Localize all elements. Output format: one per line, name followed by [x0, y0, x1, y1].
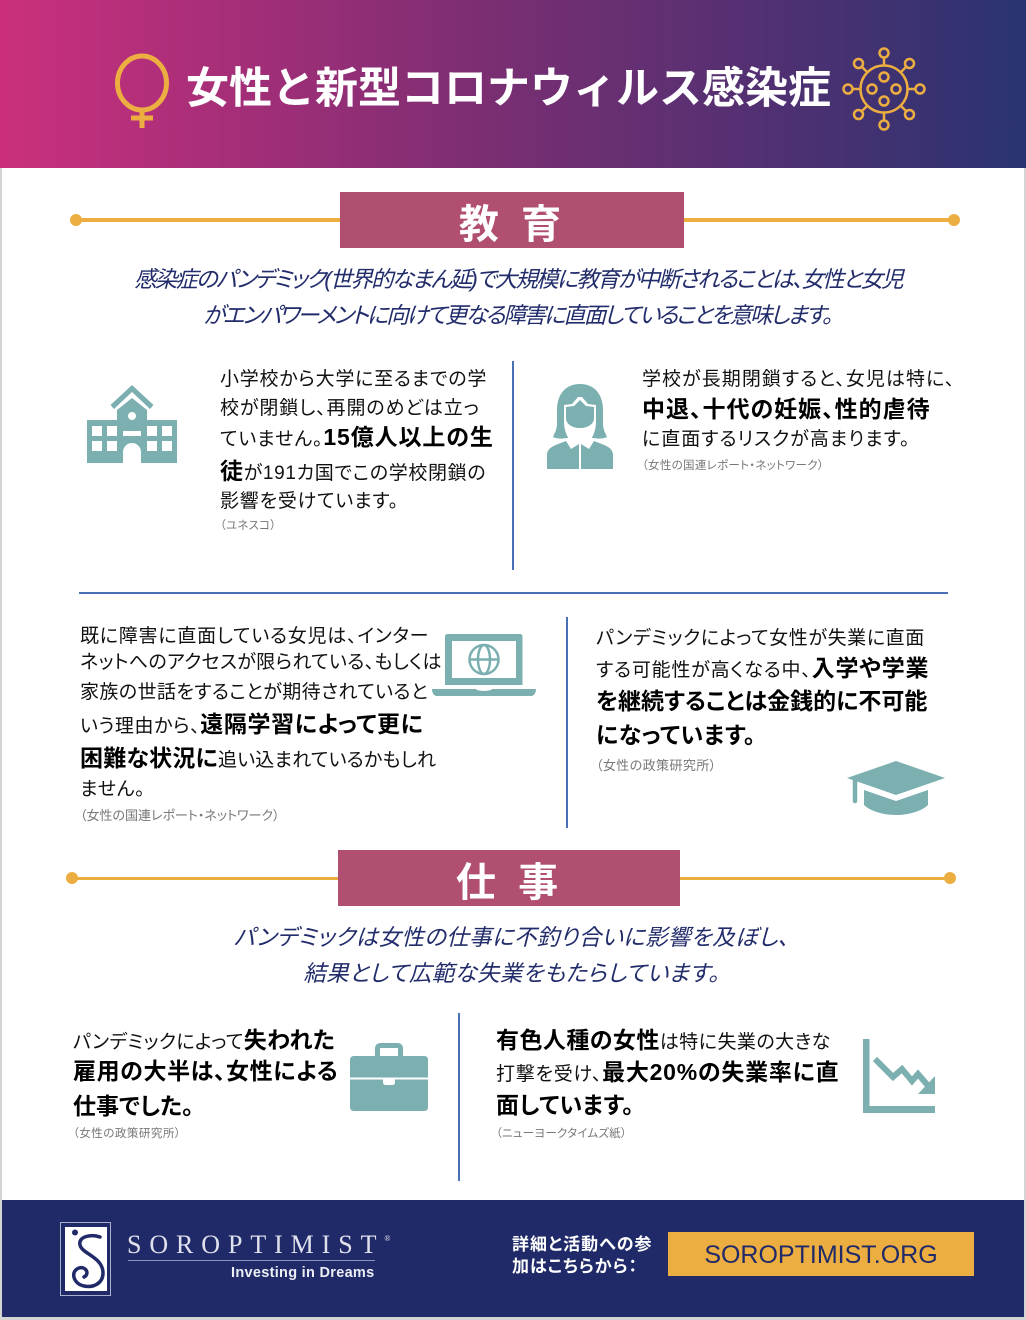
text: women of colour unemployment: 打撃を受け、最大20%の失業率に直 [496, 1059, 839, 1085]
text: school closures: 小学校から大学に至るまでの学 [220, 369, 487, 390]
icon: laptop [432, 634, 536, 696]
text: women of colour unemployment: 面しています。 [496, 1092, 634, 1118]
work intro: 結果として広範な失業をもたらしています。 [303, 961, 720, 986]
text: remote learning: いう理由から、遠隔学習によって更に [80, 711, 423, 737]
text: girls risks [642, 368, 955, 472]
text: school closures: 校が閉鎖し、再開のめどは立っ [220, 398, 480, 419]
footer call to action [512, 1235, 653, 1276]
section heading: education [340, 192, 684, 248]
logo mark [60, 1222, 111, 1296]
footer call to action: 加はこちらから： [512, 1257, 638, 1276]
text: school closures: 徒が191カ国でこの学校閉鎖の [220, 458, 486, 484]
text: remote learning [80, 626, 442, 823]
section heading: work: 仕 事 [456, 861, 558, 905]
section heading: education: 教 育 [459, 203, 561, 247]
text: remote learning: ネットへのアクセスが限られている、もしくは [80, 652, 442, 673]
text: job losses: 仕事でした。 [73, 1093, 194, 1119]
section line: work [72, 876, 950, 880]
text: girls risks: 中退、十代の妊娠、性的虐待 [642, 396, 931, 422]
text: job losses: 雇用の大半は、女性による [73, 1058, 338, 1084]
text: job losses: パンデミックによって失われた [73, 1027, 335, 1053]
footer call to action: 詳細と活動への参 [512, 1235, 653, 1254]
text: girls risks: に直面するリスクが高まります。 [642, 429, 910, 450]
icon: school [87, 385, 177, 463]
text: job losses [73, 1027, 338, 1140]
text: women of colour unemployment [496, 1027, 839, 1140]
education intro: がエンパワーメントに向けて更なる障害に直面していることを意味します。 [203, 303, 831, 328]
text: job losses: （女性の政策研究所） [73, 1128, 181, 1140]
icon: virus [842, 47, 926, 131]
text: financial barriers: する可能性が高くなる中、入学や学業 [596, 655, 929, 681]
text: women of colour unemployment: 有色人種の女性は特に失業の大きな [496, 1027, 831, 1053]
header banner [0, 0, 1026, 168]
icon: girl student [547, 384, 613, 469]
title: 女性と新型コロナウィルス感染症 [186, 65, 831, 113]
divider [79, 592, 948, 594]
section line: education [76, 218, 954, 222]
text: financial barriers: （女性の政策研究所） [596, 758, 717, 773]
education intro [134, 267, 906, 328]
text: remote learning: ません。 [80, 779, 145, 800]
text: girls risks: （女性の国連レポート・ネットワーク） [642, 460, 824, 472]
text: school closures [220, 368, 494, 532]
text: girls risks: 学校が長期閉鎖すると、女児は特に、 [642, 369, 955, 390]
text: school closures: ていません。15億人以上の生 [220, 424, 494, 450]
logo: Soroptimist [60, 1222, 390, 1296]
website button [668, 1232, 974, 1276]
text: school closures: 影響を受けています。 [220, 491, 399, 512]
icon: venus symbol [115, 54, 169, 128]
education intro: 感染症のパンデミック(世界的なまん延)で大規模に教育が中断されることは、女性と女児 [134, 267, 902, 292]
footer [2, 1200, 1024, 1317]
text: remote learning: 既に障害に直面している女児は、インター [80, 626, 429, 647]
icon: graduation cap [847, 761, 945, 815]
work intro: パンデミックは女性の仕事に不釣り合いに影響を及ぼし、 [234, 925, 789, 950]
section heading: work [338, 850, 680, 906]
icon: briefcase [350, 1043, 428, 1111]
wordmark: SOROPTIMIST® [127, 1230, 390, 1259]
text: school closures: （ユネスコ） [220, 520, 276, 532]
work intro [234, 925, 789, 986]
text: remote learning: 家族の世話をすることが期待されていると [80, 682, 428, 703]
text: remote learning: 困難な状況に追い込まれているかもしれ [80, 745, 436, 771]
text: remote learning: （女性の国連レポート・ネットワーク） [80, 808, 280, 823]
text: financial barriers: パンデミックによって女性が失業に直面 [596, 628, 925, 649]
text: women of colour unemployment: （ニューヨークタイムズ紙） [496, 1128, 627, 1140]
text: financial barriers: になっています。 [596, 722, 756, 748]
text: financial barriers: を継続することは金銭的に不可能 [596, 688, 927, 714]
tagline: Investing in Dreams [231, 1265, 374, 1281]
text: financial barriers [596, 628, 929, 773]
icon: declining chart [863, 1039, 935, 1113]
website button: SOROPTIMIST.ORG [704, 1241, 938, 1269]
